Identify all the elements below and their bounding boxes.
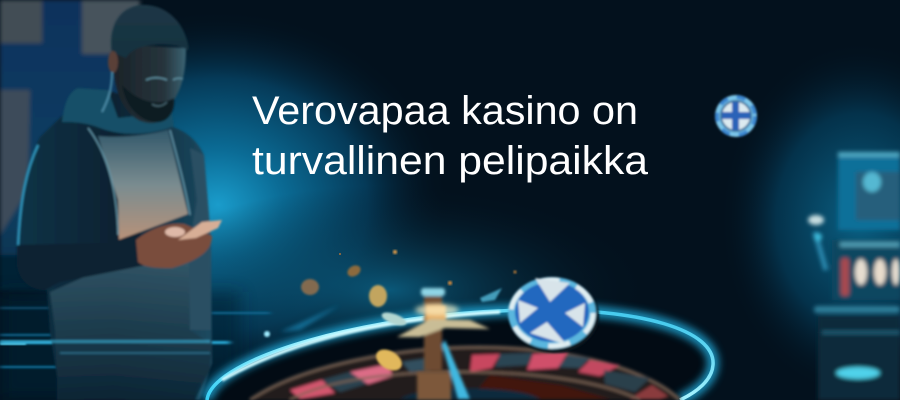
roulette wheel xyxy=(250,347,680,400)
slot reels xyxy=(841,258,849,296)
roulette glow ring xyxy=(207,310,713,400)
hair xyxy=(111,5,189,58)
hand xyxy=(136,224,212,268)
sparks xyxy=(264,250,516,337)
chip rim xyxy=(508,277,596,349)
beard xyxy=(122,85,174,122)
light streaks: floor xyxy=(0,292,270,400)
hoodie xyxy=(17,88,212,400)
slot base xyxy=(818,316,900,400)
heading xyxy=(252,89,649,183)
smile xyxy=(152,102,167,106)
phone xyxy=(178,220,222,240)
arm xyxy=(17,232,146,290)
slot buttons xyxy=(814,306,900,313)
head xyxy=(112,44,186,123)
shirt xyxy=(98,130,188,240)
chip rim segments xyxy=(511,280,593,346)
slot body xyxy=(832,240,900,300)
lower hoodie front xyxy=(50,258,212,400)
chip face xyxy=(515,282,589,342)
hood outline xyxy=(62,88,174,134)
neck rim xyxy=(102,72,112,112)
drawstrings xyxy=(88,128,190,235)
eyes and cheek light xyxy=(146,78,183,80)
finnish flag chip xyxy=(508,277,599,353)
right sleeve xyxy=(189,148,211,330)
chip wedges xyxy=(518,278,585,345)
ear xyxy=(108,51,118,73)
roulette spindle xyxy=(397,288,490,400)
slot screen xyxy=(838,155,900,230)
heading: turvallinen pelipaikka xyxy=(252,139,649,183)
slot lever xyxy=(815,232,826,270)
slot machine xyxy=(808,152,900,400)
pockets xyxy=(290,352,668,399)
badge icon: finnish chip xyxy=(715,95,757,137)
man with phone xyxy=(0,5,222,400)
coins xyxy=(301,263,408,375)
finnish flag backdrop xyxy=(0,0,140,290)
heading: Verovapaa kasino on xyxy=(252,89,638,133)
floor streaks over figure xyxy=(0,340,210,343)
